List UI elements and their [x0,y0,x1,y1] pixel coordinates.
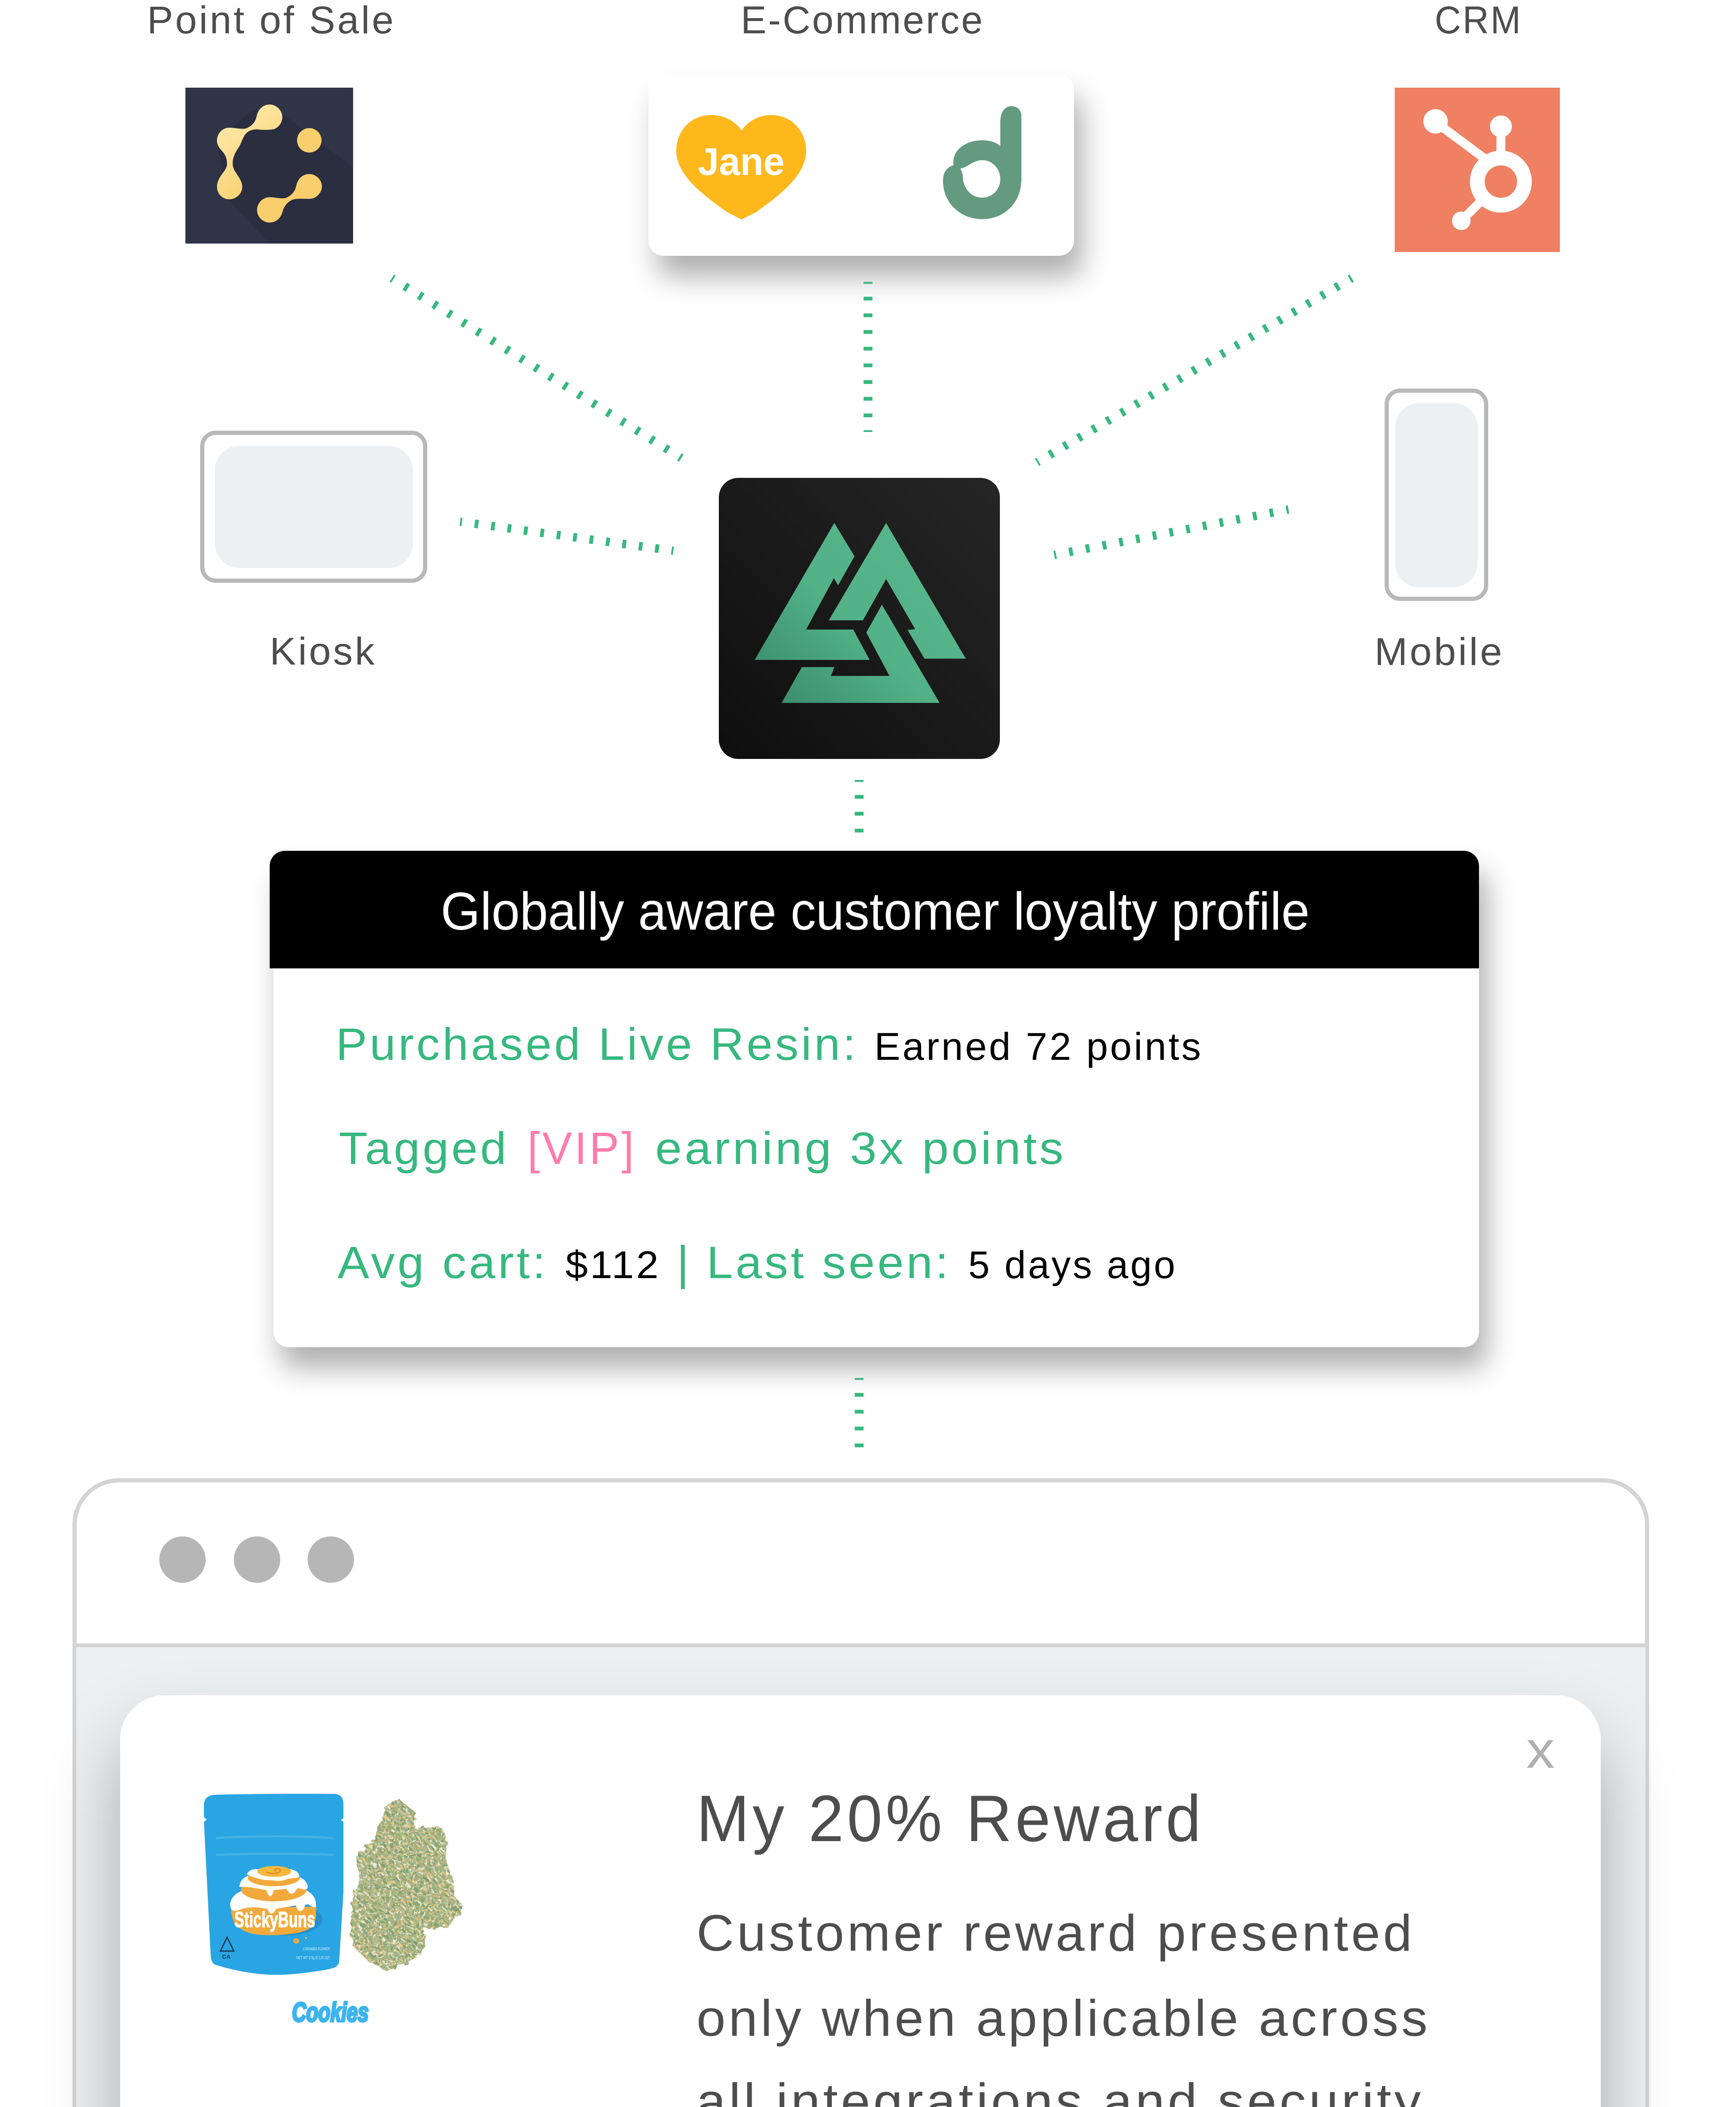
icon: point of sale logo [185,88,353,244]
browser window dots [159,1536,354,1583]
icon: Jane heart logo: Jane [698,140,785,183]
connector: CRM to hub [1037,278,1352,462]
profile line: purchase [336,1019,1203,1070]
profile line: VIP tag: Tagged [339,1123,509,1174]
product bag [204,1794,343,1975]
icon: d logo [943,106,1021,219]
connector: e-commerce to hub [864,282,872,432]
profile line: purchase: Earned 72 points [874,1025,1203,1068]
profile header bar: Globally aware customer loyalty profile [441,882,1310,941]
product bag: CANNABIS FLOWER [303,1947,330,1952]
image: product bag and flower [204,1794,466,2027]
icon: central hub logo [719,478,1000,759]
profile line: cart and last seen: $112 [565,1244,661,1287]
panel: e-commerce logos [648,75,1082,277]
icon: kiosk device [202,433,425,581]
label: CRM: CRM [1435,0,1522,42]
flower bud [348,1797,466,1974]
reward description: Customer reward presented [697,1904,1415,1962]
label: Mobile: Mobile [1374,630,1504,673]
label: Kiosk: Kiosk [270,630,377,673]
connector: point of sale to hub [392,278,681,458]
profile line: purchase: Purchased Live Resin: [336,1019,858,1070]
connector: mobile to hub [1054,509,1289,555]
reward description: only when applicable across [697,1989,1431,2047]
profile line: cart and last seen: Last seen: [707,1237,951,1288]
product bag: NET WT 3.5g (0.125 OZ) [296,1956,330,1960]
panel: reward popup [120,1695,1601,2107]
close button: x [1526,1721,1555,1779]
profile header bar [270,851,1479,968]
panel: browser window [72,1480,1649,2107]
reward heading: My 20% Reward [697,1782,1204,1855]
panel: customer loyalty profile [270,851,1487,1368]
connector: profile to browser [855,1378,864,1453]
product bag: StickyBuns [234,1908,315,1932]
icon: Jane heart logo [676,115,806,220]
Cookies brand mark: Cookies [292,1997,369,2027]
icon: CRM hub logo [1395,88,1560,252]
profile line: VIP tag [339,1123,1066,1174]
label: E-Commerce: E-Commerce [741,0,984,42]
reward description [697,1904,1431,2107]
icon: mobile device [1387,391,1486,599]
connector: hub to profile [855,780,864,835]
profile line: cart and last seen [338,1237,1177,1289]
label: Point of Sale: Point of Sale [147,0,396,42]
profile line: VIP tag: earning 3x points [655,1123,1066,1174]
connector: kiosk to hub [460,522,673,551]
profile line: cart and last seen: Avg cart: [338,1237,548,1288]
product bag: CA [222,1953,230,1960]
profile line: VIP tag: [VIP] [528,1123,636,1174]
profile line: cart and last seen: 5 days ago [968,1244,1177,1287]
